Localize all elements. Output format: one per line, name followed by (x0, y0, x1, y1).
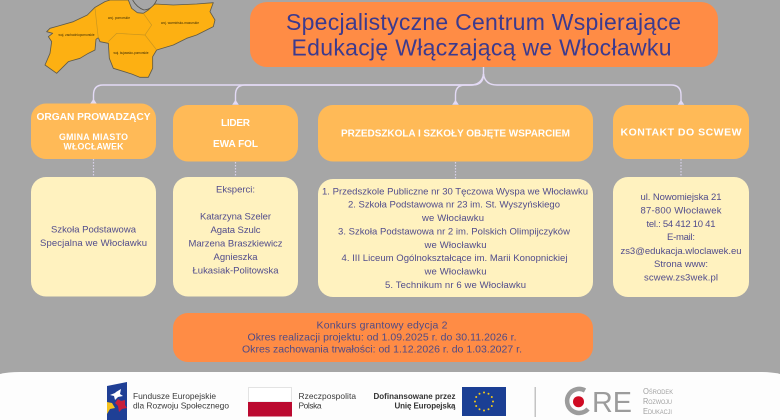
text: Dofinansowane przez Unię Europejską: Dofinansowane przez (374, 392, 456, 401)
text: Dofinansowane przez Unię Europejską (374, 392, 456, 411)
text: Fundusze Europejskie (133, 391, 229, 411)
panel: eksperci body: Katarzyna Szeler (200, 212, 271, 223)
icon: EU flag (462, 387, 506, 416)
panel: lider header: LIDER (221, 118, 251, 129)
panel: eksperci body: Marzena Braszkiewicz (188, 238, 283, 249)
panel: kontakt body: tel.: 54 412 10 41 (646, 219, 716, 230)
title box: Edukację Włączającą we Włocławku (292, 34, 672, 60)
text: Rzeczpospolita Polska (298, 391, 356, 411)
panel: organ prowadzący header: WŁOCŁAWEK (64, 142, 124, 152)
panel: przedszkola list body (318, 179, 593, 297)
panel: eksperci body: Agnieszka (214, 252, 258, 263)
panel: organ prowadzący body: Szkoła Podstawowa (51, 225, 137, 236)
panel: przedszkola list body: 3. Szkoła Podstawowa nr 2 im. Polskich Olimpijczyków (338, 226, 570, 238)
panel: przedszkola list body: we Włocławku (424, 240, 486, 251)
icon: Fundusze Europejskie flag (107, 382, 127, 420)
panel: przedszkola list body: we Włocławku (421, 213, 484, 224)
logo: ORE: RE (592, 387, 632, 419)
panel: przedszkola list body: 4. III Liceum Ogólnokształcące im. Marii Konopnickiej (342, 253, 568, 264)
text: Rzeczpospolita Polska: Polska (298, 401, 322, 411)
panel: eksperci body: Łukasiak-Politowska (192, 265, 279, 276)
icon: Polish flag (248, 388, 292, 416)
panel: lider header: EWA FOL (213, 139, 258, 150)
panel: kontakt body: E-mail: (667, 232, 695, 243)
logo: ORE: Rozwoju (643, 397, 672, 406)
panel: przedszkola list body: we Włocławku (424, 266, 486, 278)
panel: organ prowadzący header (31, 104, 156, 159)
map of northern Poland: woj. pomorskie (108, 16, 130, 20)
panel: kontakt body: scwew.zs3wek.pl (644, 272, 718, 284)
panel: przedszkola list body: 1. Przedszkole Publiczne nr 30 Tęczowa Wyspa we Włocławku (322, 186, 588, 197)
panel: kontakt body (613, 177, 749, 297)
map of northern Poland (45, 0, 215, 77)
logo: ORE (567, 387, 673, 419)
text: Rzeczpospolita Polska: Rzeczpospolita (298, 391, 356, 401)
panel: organ prowadzący header: ORGAN PROWADZĄCY (36, 112, 151, 123)
panel: eksperci body (173, 177, 298, 296)
panel: kontakt body: 87-800 Włocławek (640, 206, 722, 216)
panel: kontakt header: KONTAKT DO SCWEW (620, 127, 742, 139)
panel: kontakt body: zs3@edukacja.wloclawek.eu (620, 246, 742, 257)
panel: lider header (173, 105, 298, 162)
panel: eksperci body: Eksperci: (216, 185, 255, 196)
map of northern Poland: woj. warmińsko-mazurskie (161, 21, 199, 25)
panel: organ prowadzący body (31, 177, 156, 296)
panel: przedszkola header: PRZEDSZKOLA I SZKOŁY OBJĘTE WSPARCIEM (341, 129, 570, 140)
panel: kontakt body: ul. Nowomiejska 21 (640, 192, 722, 203)
panel: grant period band (173, 313, 593, 362)
footer logo strip (0, 372, 780, 420)
title box: Specjalistyczne Centrum Wspierające (286, 9, 681, 35)
panel: przedszkola list body: 2. Szkoła Podstawowa nr 23 im. St. Wyszyńskiego (348, 200, 560, 211)
logo: ORE: Edukacji (643, 407, 672, 416)
panel: organ prowadzący body: Specjalna we Włocławku (40, 238, 147, 249)
panel: kontakt body: Strona www: (654, 259, 708, 270)
panel: eksperci body: Agata Szulc (210, 225, 261, 236)
map of northern Poland: woj. kujawsko-pomorskie (114, 51, 149, 55)
dotted links between headers and bodies (94, 159, 681, 179)
title box (250, 2, 718, 67)
panel: przedszkola header (318, 105, 593, 162)
text: Dofinansowane przez Unię Europejską: Unię Europejską (394, 402, 456, 411)
logo: ORE: Ośrodek (643, 387, 673, 396)
panel: grant period band: Okres realizacji projektu: od 1.09.2025 r. do 30.11.2026 r. (248, 332, 516, 344)
panel: organ prowadzący header: GMINA MIASTO (59, 132, 128, 142)
connector arrows from title to columns (92, 67, 683, 104)
panel: grant period band: Okres zachowania trwałości: od 1.12.2026 r. do 1.03.2027 r. (242, 343, 522, 355)
text: Fundusze Europejskie: dla Rozwoju Społecznego (133, 401, 229, 411)
panel: grant period band: Konkurs grantowy edycja 2 (316, 320, 448, 332)
panel: przedszkola list body: 5. Technikum nr 6 we Włocławku (385, 280, 526, 291)
map of northern Poland: woj. zachodniopomorskie (58, 33, 95, 37)
text: Fundusze Europejskie: Fundusze Europejskie (133, 391, 216, 401)
panel: kontakt header (613, 105, 749, 159)
